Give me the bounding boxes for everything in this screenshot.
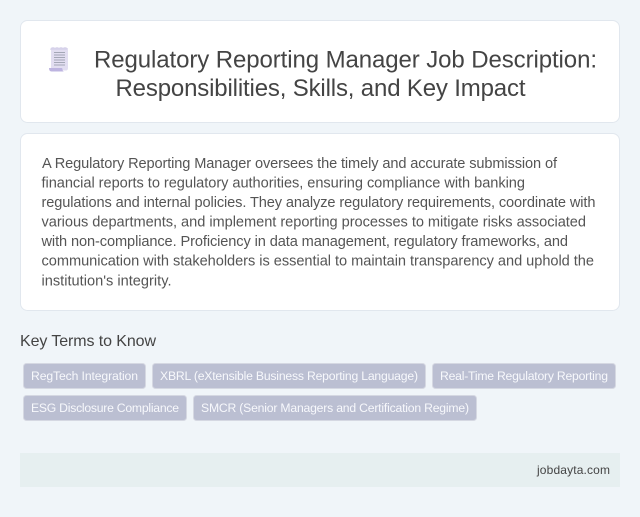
description text: institution's integrity.: [42, 274, 172, 290]
tag: SMCR: SMCR (Senior Managers and Certification Regime): [201, 401, 469, 415]
description text: financial reports to regulatory authorities, ensuring compliance with banking: [42, 176, 525, 192]
tag: XBRL: XBRL (eXtensible Business Reporting Language): [160, 369, 418, 383]
description text: regulations and internal policies. They analyze regulatory requirements, coordinate with: [42, 195, 596, 211]
panel: description: [20, 134, 620, 310]
description text: various departments, and implement reporting processes to mitigate risks associated: [42, 214, 586, 230]
footer: jobdayta.com: [536, 463, 610, 477]
description text: with non-compliance. Proficiency in data management, regulatory frameworks, and: [40, 234, 568, 250]
title: [94, 46, 597, 102]
tag: Real-Time Regulatory Reporting: [432, 364, 616, 388]
panel: header: [20, 20, 620, 122]
tag: RegTech Integration: [24, 364, 146, 388]
footer: [20, 453, 620, 487]
description text: communication with stakeholders is essential to maintain transparency and uphold the: [42, 254, 594, 270]
title: Regulatory Reporting Manager Job Description:: [94, 46, 597, 74]
tag: ESG Disclosure Compliance: [24, 396, 186, 420]
icon: report document: [49, 47, 68, 72]
title: Responsibilities, Skills, and Key Impact: [116, 75, 526, 102]
tag: XBRL: [152, 364, 426, 388]
tag: SMCR: [194, 396, 476, 420]
tag: ESG Disclosure Compliance: ESG Disclosure Compliance: [31, 401, 179, 415]
description text: A Regulatory Reporting Manager oversees the timely and accurate submission of: [42, 156, 558, 172]
heading: key terms: Key Terms to Know: [20, 333, 156, 350]
tag: Real-Time Regulatory Reporting: Real-Time Regulatory Reporting: [440, 369, 608, 383]
tag: RegTech Integration: RegTech Integration: [31, 369, 138, 383]
description text: [40, 156, 596, 290]
